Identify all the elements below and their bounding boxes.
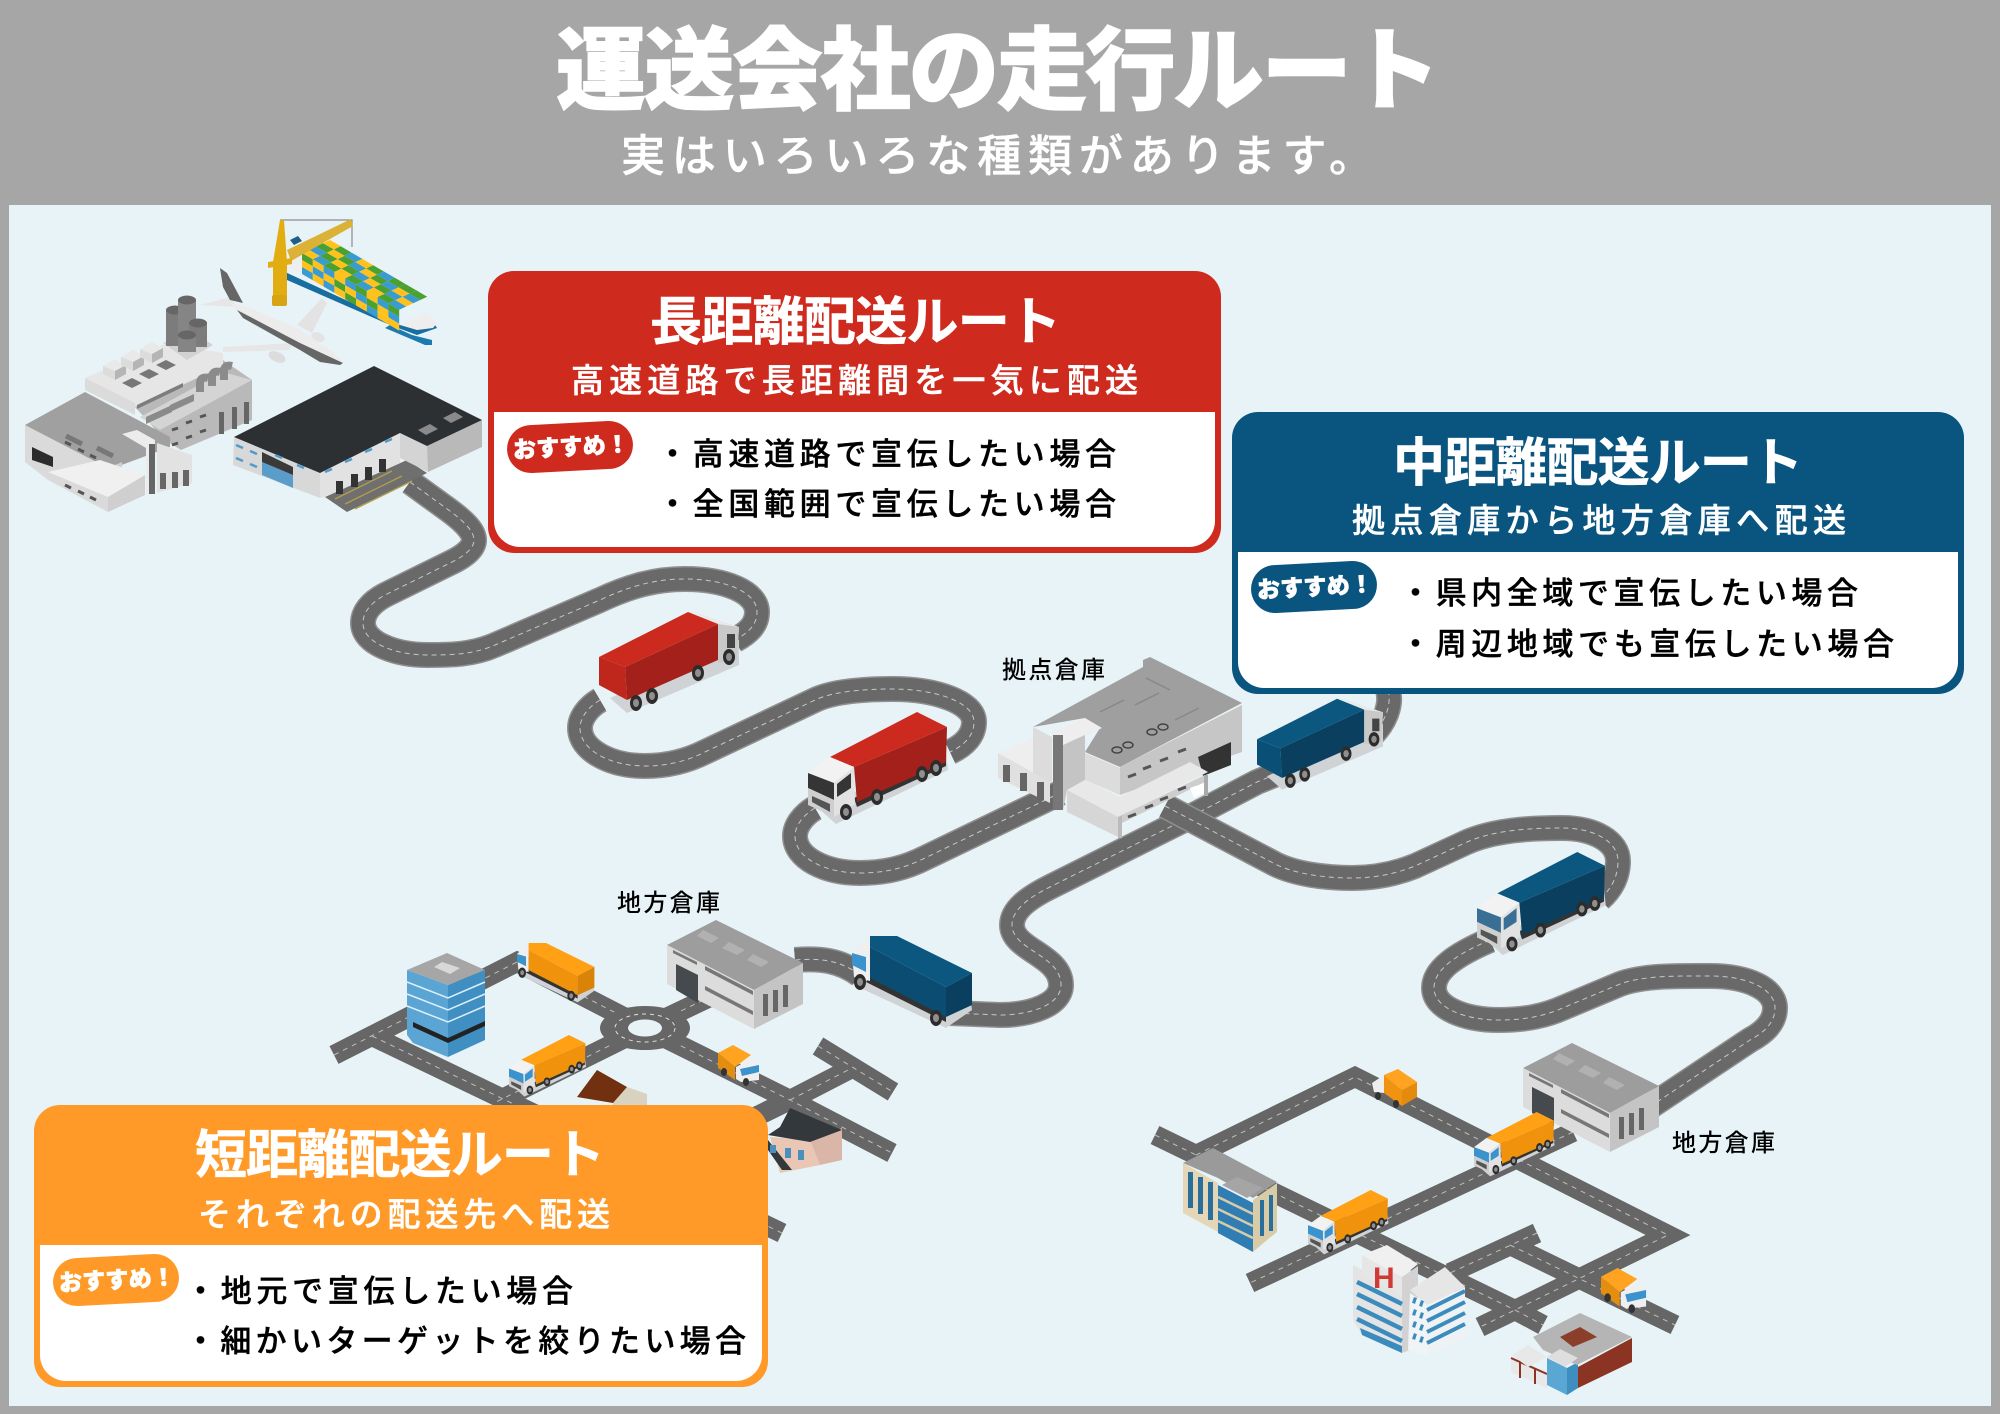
medium distance road bbox=[795, 690, 1775, 1110]
icon: dispatch warehouse bbox=[233, 366, 482, 512]
icon: airplane bbox=[200, 268, 343, 365]
panel heading: 短距離配送ルート bbox=[195, 1127, 605, 1185]
truck: orange, left town top bbox=[517, 943, 594, 1002]
truck: red, long distance 2 bbox=[808, 712, 948, 824]
panel: medium distance route bbox=[1232, 412, 1964, 694]
icon: hospital bbox=[1353, 1245, 1465, 1355]
bullets: ・高速道路で宣伝したい場合 bbox=[657, 437, 1116, 472]
bullets: ・全国範囲で宣伝したい場合 bbox=[657, 487, 1116, 522]
icon: container ship and crane bbox=[268, 219, 437, 345]
truck: red, long distance 1 bbox=[599, 610, 739, 713]
truck: blue, medium distance 3 bbox=[852, 936, 972, 1028]
truck: blue, medium distance 1 bbox=[1257, 697, 1383, 790]
truck: orange small, left town right bbox=[718, 1045, 759, 1086]
label: hub warehouse: 拠点倉庫 bbox=[1002, 657, 1105, 684]
truck: orange, left town middle bbox=[509, 1035, 586, 1097]
short distance road network: left town bbox=[334, 962, 893, 1233]
icon: school building bbox=[1511, 1313, 1632, 1395]
truck: blue, medium distance 2 bbox=[1477, 852, 1606, 955]
icon: hub warehouse bbox=[998, 657, 1242, 838]
panel: long distance route bbox=[488, 271, 1221, 553]
recommend badge: おすすめ！ bbox=[58, 1264, 176, 1296]
subtitle: 実はいろいろな種類があります。 bbox=[621, 132, 1373, 181]
icon: right regional warehouse bbox=[1523, 1043, 1659, 1152]
panel subheading: それぞれの配送先へ配送 bbox=[198, 1196, 610, 1233]
bullets: ・細かいターゲットを絞りたい場合 bbox=[185, 1324, 746, 1359]
bullets: ・地元で宣伝したい場合 bbox=[185, 1274, 573, 1309]
icon: left regional warehouse bbox=[667, 920, 803, 1029]
bullets bbox=[657, 437, 1116, 522]
long distance road bbox=[363, 482, 1060, 873]
truck: orange small, right town top bbox=[1372, 1069, 1417, 1108]
bullets bbox=[185, 1274, 746, 1359]
icon: blue office tower bbox=[407, 953, 485, 1057]
truck: orange small, right town bottom bbox=[1601, 1268, 1646, 1313]
recommend badge bbox=[1250, 560, 1378, 614]
truck: orange, right town 1 bbox=[1474, 1112, 1554, 1176]
icon: factory bbox=[25, 296, 252, 512]
title: 運送会社の走行ルート bbox=[556, 22, 1440, 122]
recommend badge: おすすめ！ bbox=[1256, 571, 1374, 603]
panel heading: 長距離配送ルート bbox=[650, 294, 1061, 352]
short distance road network: right town bbox=[1155, 1077, 1675, 1327]
recommend badge bbox=[506, 420, 634, 474]
recommend badge: おすすめ！ bbox=[512, 431, 630, 463]
icon: apartment block bbox=[1183, 1148, 1277, 1252]
icon: hospital: H bbox=[1373, 1262, 1395, 1295]
bullets: ・周辺地域でも宣伝したい場合 bbox=[1400, 627, 1894, 662]
panel subheading: 拠点倉庫から地方倉庫へ配送 bbox=[1352, 502, 1846, 539]
label: right regional warehouse: 地方倉庫 bbox=[1672, 1130, 1775, 1157]
bullets bbox=[1400, 576, 1894, 662]
panel heading: 中距離配送ルート bbox=[1393, 435, 1803, 493]
icon: pink house bbox=[768, 1108, 842, 1173]
label: left regional warehouse: 地方倉庫 bbox=[617, 890, 720, 917]
panel subheading: 高速道路で長距離間を一気に配送 bbox=[571, 362, 1138, 399]
icon: brown house bbox=[577, 1070, 647, 1112]
panel: short distance route bbox=[34, 1105, 768, 1387]
truck: orange, right town 2 bbox=[1308, 1190, 1388, 1254]
recommend badge bbox=[52, 1253, 180, 1307]
bullets: ・県内全域で宣伝したい場合 bbox=[1400, 576, 1858, 611]
